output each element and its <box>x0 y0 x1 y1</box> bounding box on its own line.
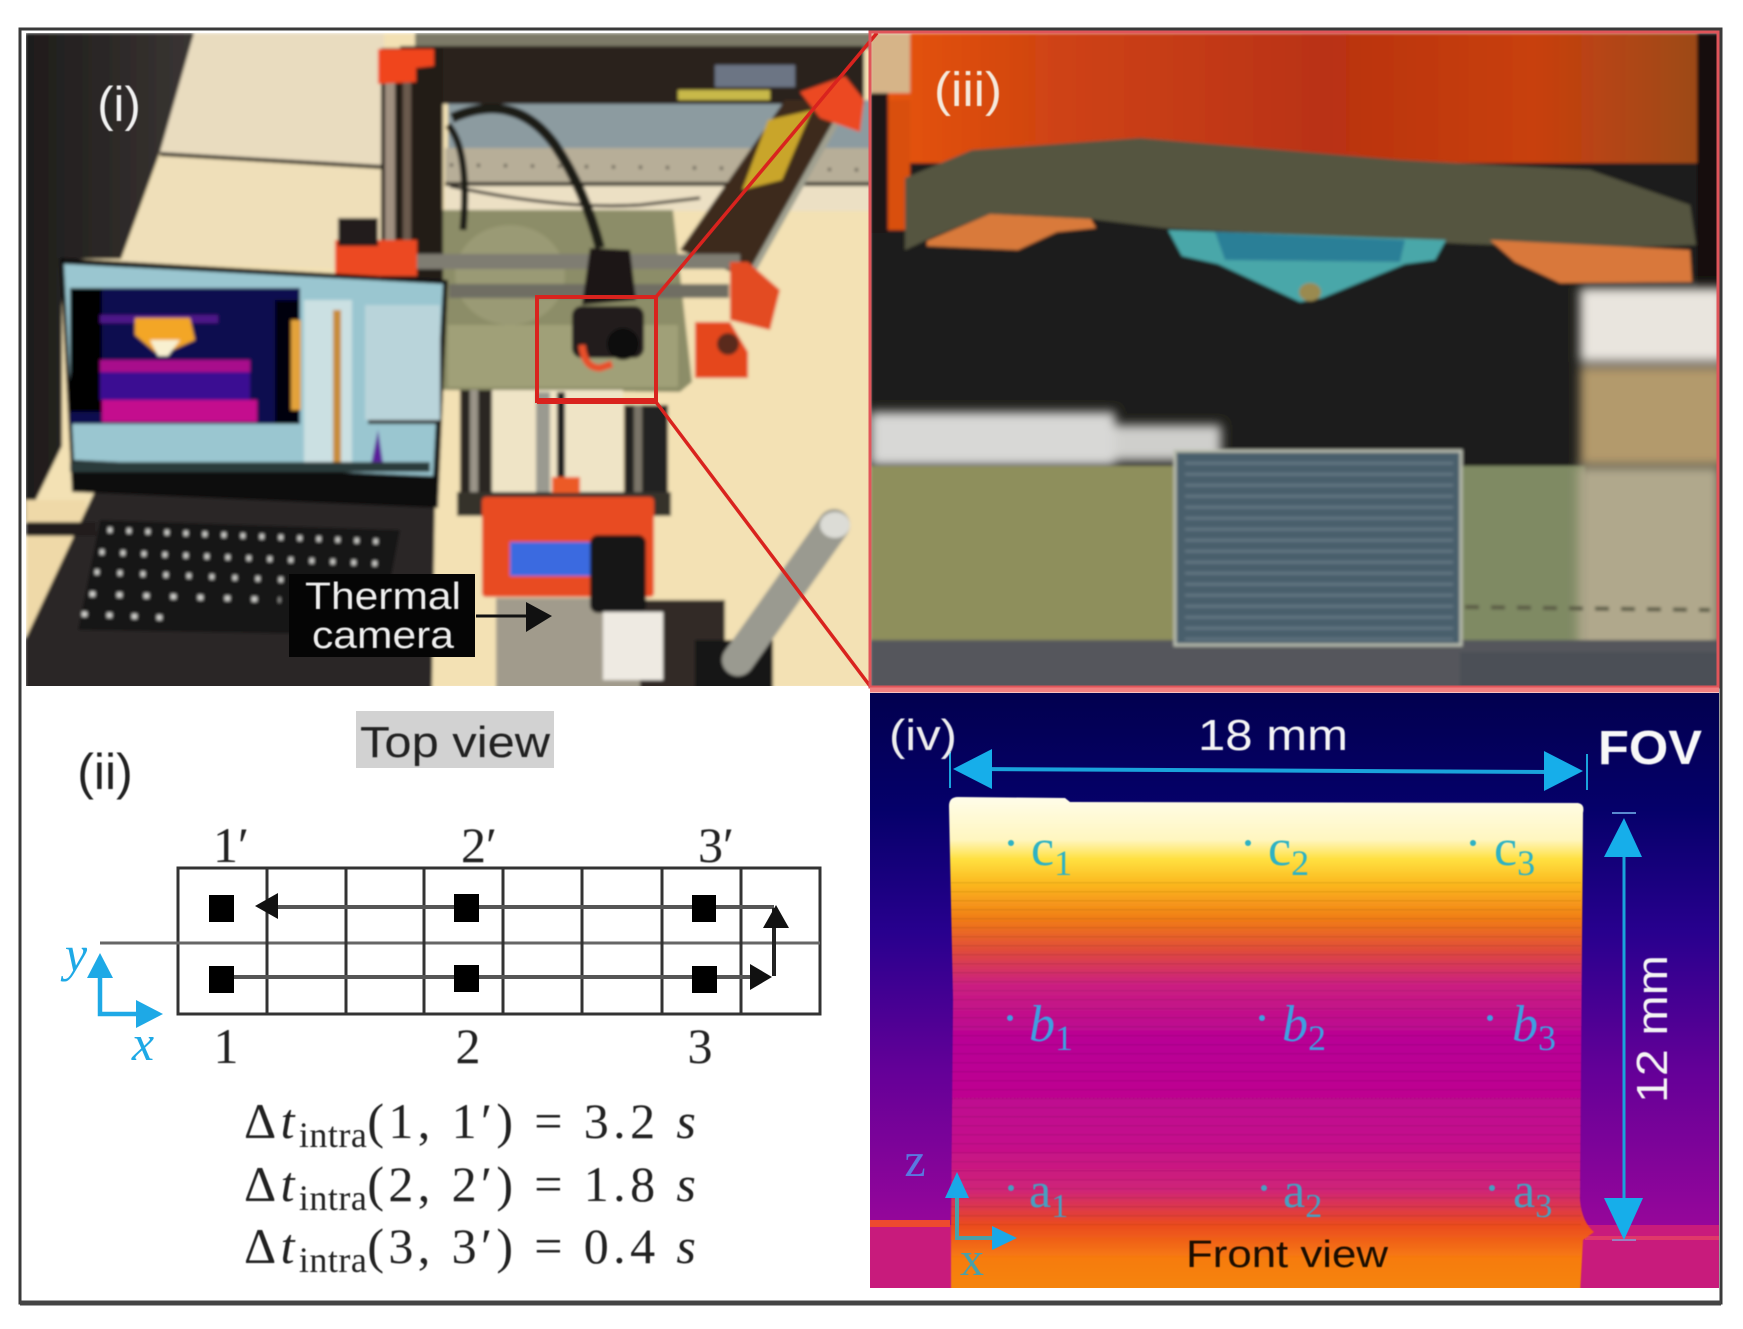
top row labels c: 1 <box>1054 843 1072 883</box>
xy axis icon: y <box>60 926 88 982</box>
top row labels c <box>1008 820 1535 883</box>
12 mm dimension arrow <box>1604 813 1643 1240</box>
bottom point labels: 1 <box>214 1018 238 1074</box>
top point labels: 2′ <box>461 817 497 873</box>
intra-layer time equations: intra <box>299 1240 367 1280</box>
callout: thermal camera <box>289 574 475 657</box>
12 mm label: 12 mm <box>1628 955 1677 1103</box>
printer frame <box>400 46 864 104</box>
intra-layer time equations: (3, 3′) = 0.4 <box>367 1218 676 1274</box>
bottom row labels a: 1 <box>1051 1188 1068 1225</box>
intra-layer time equations: intra <box>299 1178 367 1218</box>
panel label (iii): (iii) <box>934 64 1002 117</box>
xz axis icon: z <box>904 1134 926 1187</box>
heading: Top view: Top view <box>360 718 550 767</box>
top row labels c: c <box>1494 820 1517 877</box>
intra-layer time equations: (2, 2′) = 1.8 <box>367 1156 676 1212</box>
bottom point labels <box>214 1018 712 1074</box>
teal nozzle <box>1168 230 1446 302</box>
lcd controller <box>482 497 654 597</box>
intra-layer time equations: Δt <box>244 1093 299 1149</box>
18 mm label: 18 mm <box>1198 711 1348 760</box>
middle row labels b: b <box>1512 996 1538 1053</box>
panel label (ii): (ii) <box>77 744 133 800</box>
panel: (ii) top view scan path <box>60 711 820 1280</box>
middle row labels b: 3 <box>1538 1018 1556 1058</box>
orange printer corners <box>378 49 434 84</box>
measurement points <box>209 894 717 993</box>
grey rod <box>738 525 834 660</box>
panel: (iv) thermal front view <box>870 693 1725 1293</box>
right blurred background objects <box>870 288 1725 466</box>
FOV label: FOV <box>1598 722 1702 775</box>
substrate below wall <box>870 1220 1725 1289</box>
foam orange pieces <box>927 214 1096 250</box>
extruder <box>582 248 636 305</box>
intra-layer time equations: s <box>676 1218 700 1274</box>
bottom row labels a <box>1008 1162 1552 1225</box>
caption: Front view: Front view <box>1186 1234 1389 1276</box>
top point labels <box>213 817 734 873</box>
dark grey silicone band <box>905 138 1696 250</box>
callout: thermal camera: Thermal <box>305 576 461 618</box>
panel label (iv): (iv) <box>889 711 957 760</box>
scan path lines and arrows <box>222 893 789 990</box>
panel border for (iii) <box>870 32 1718 687</box>
top point labels: 1′ <box>213 817 249 873</box>
intra-layer time equations: Δt <box>244 1156 299 1212</box>
intra-layer time equations: (1, 1′) = 3.2 <box>367 1093 676 1149</box>
thermal printed wall <box>949 797 1594 1293</box>
bottom row labels a: a <box>1283 1162 1305 1218</box>
top row labels c: c <box>1268 820 1291 877</box>
intra-layer time equations: intra <box>299 1115 367 1155</box>
rods <box>415 254 740 269</box>
bottom row labels a: a <box>1513 1162 1535 1218</box>
xy axis icon <box>60 926 163 1071</box>
back wall and glass <box>415 33 873 49</box>
print bed <box>443 210 692 392</box>
18 mm dimension arrow <box>950 749 1587 791</box>
panel: (iii) close-up of nozzle and printed wall <box>870 33 1725 690</box>
thermal camera body <box>590 535 646 613</box>
intra-layer time equations <box>244 1093 700 1280</box>
thermal background <box>870 693 1719 1225</box>
black cable <box>452 109 600 248</box>
camera stand base <box>496 598 641 690</box>
desk and printer photograph <box>25 33 873 690</box>
arrow to thermal camera <box>476 602 552 632</box>
laptop base and keyboard <box>25 491 435 690</box>
printed wall <box>1175 451 1461 645</box>
middle row labels b: 2 <box>1308 1018 1326 1058</box>
y axis rails <box>491 390 623 495</box>
bottom row labels a: 3 <box>1535 1188 1552 1225</box>
middle row labels b: b <box>1029 996 1055 1053</box>
panel: (i) photo of printer and laptop <box>25 33 873 690</box>
top point labels: 3′ <box>698 817 734 873</box>
bottom row labels a: a <box>1029 1162 1051 1218</box>
zoom line: lower <box>656 402 870 686</box>
intra-layer time equations: s <box>676 1093 700 1149</box>
dark bed edge <box>870 640 1723 690</box>
middle row labels b: 1 <box>1055 1018 1073 1058</box>
intra-layer time equations: Δt <box>244 1218 299 1274</box>
close-up photograph <box>870 33 1725 690</box>
scan grid <box>100 868 820 1014</box>
middle row labels b <box>1007 996 1556 1058</box>
callout: thermal camera: camera <box>312 615 455 657</box>
top row labels c: 2 <box>1291 843 1309 883</box>
xz axis icon: x <box>960 1233 984 1286</box>
zoom line: upper <box>656 33 877 297</box>
laptop screen <box>60 258 448 508</box>
olive print bed <box>872 464 1175 642</box>
middle row labels b: b <box>1282 996 1308 1053</box>
bottom point labels: 3 <box>688 1018 712 1074</box>
top row labels c: 3 <box>1517 843 1535 883</box>
top row labels c: c <box>1031 820 1054 877</box>
bottom point labels: 2 <box>456 1018 480 1074</box>
bottom row labels a: 2 <box>1305 1188 1322 1225</box>
intra-layer time equations: s <box>676 1156 700 1212</box>
xy axis icon: x <box>131 1015 154 1071</box>
panel label (i): (i) <box>97 78 141 132</box>
red zoom box <box>537 297 656 401</box>
xz axis icon <box>904 1134 1017 1286</box>
